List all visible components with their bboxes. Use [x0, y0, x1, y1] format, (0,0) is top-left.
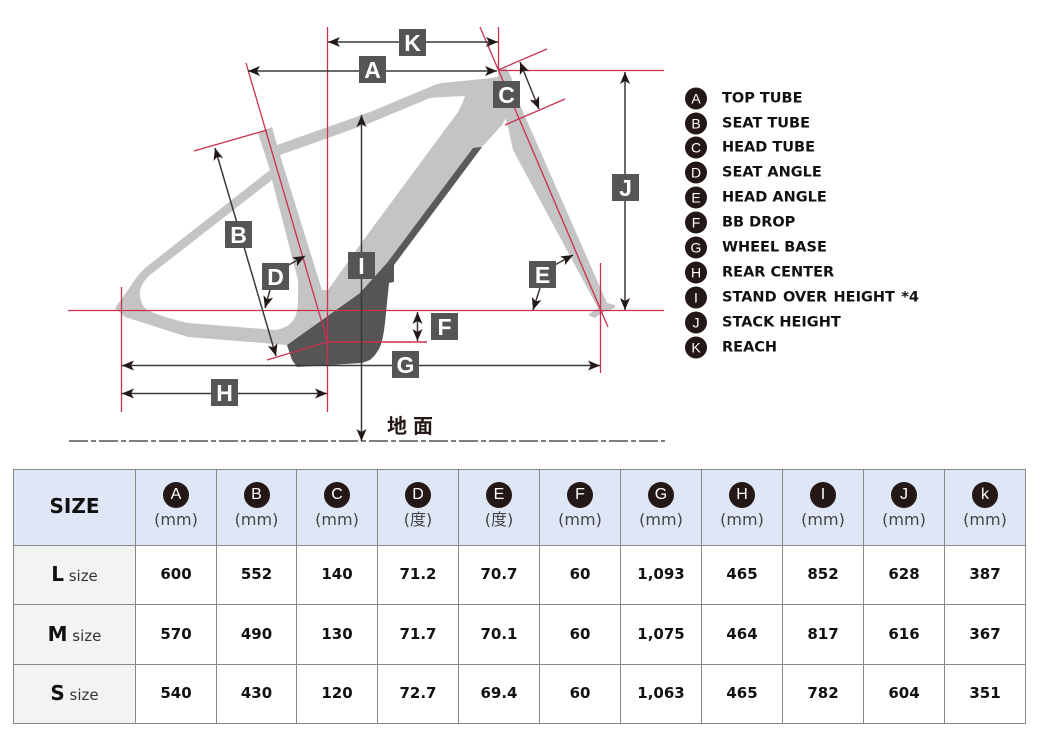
tag B: B: [230, 222, 247, 248]
front fork: [498, 68, 615, 318]
row: M size: 490: [241, 624, 272, 642]
tag I: I: [358, 253, 365, 279]
arrow: head angle lower: [533, 288, 540, 310]
legend item G: WHEEL BASE: [722, 240, 827, 256]
arrow: head angle upper: [553, 255, 573, 266]
legend item B: [685, 112, 810, 134]
arrow: seat angle lower: [265, 290, 270, 308]
legend item J: [685, 312, 841, 334]
row: M size: 60: [570, 624, 590, 642]
row: S size: S size: [50, 681, 99, 705]
table header row: [14, 470, 1025, 723]
tag K: K: [404, 30, 421, 56]
table header row: (mm): [963, 510, 1007, 529]
tag G: [392, 351, 419, 378]
ground label: 地面: [387, 410, 439, 439]
legend item E: [685, 186, 827, 208]
legend item B: B: [691, 116, 701, 132]
row: L size: 465: [726, 565, 758, 583]
legend item J: STACK HEIGHT: [722, 314, 841, 330]
legend item I: I: [694, 290, 698, 306]
arrow: reach: [328, 41, 498, 43]
legend item K: K: [691, 340, 701, 356]
frame: main triangle and rear triangle: [115, 75, 510, 345]
tag D: [262, 263, 289, 290]
legend item H: [685, 262, 834, 284]
row: S size: 1,063: [637, 684, 685, 702]
legend item E: E: [691, 190, 701, 206]
table header row: J: [900, 486, 908, 503]
row: S size: 430: [241, 684, 272, 702]
legend item G: G: [691, 240, 701, 256]
row: L size: 600: [160, 565, 192, 583]
table header row: A: [171, 486, 181, 503]
arrow: top tube: [248, 70, 497, 72]
row: M size: 616: [888, 624, 920, 642]
row: L size: [14, 546, 1001, 604]
row: M size: 1,075: [637, 624, 685, 642]
row: S size: 465: [726, 684, 758, 702]
row: L size: 1,093: [637, 565, 685, 583]
row: S size: 782: [807, 684, 839, 702]
legend item F: BB DROP: [722, 214, 796, 230]
row: L size: 852: [807, 565, 839, 583]
bike geometry diagram: [68, 26, 919, 442]
row: L size: 140: [321, 565, 353, 583]
legend item C: [685, 136, 815, 158]
tag F: F: [437, 314, 452, 340]
legend item I: STAND OVER HEIGHT *4: [722, 290, 919, 306]
legend item F: [685, 212, 796, 234]
table header row: SIZE: [49, 494, 100, 518]
table header row: (度): [485, 510, 513, 529]
table header row: k: [981, 486, 989, 503]
tag A: [359, 56, 386, 83]
row: L size: 552: [241, 565, 272, 583]
arrow: bb drop: [416, 312, 418, 341]
row: M size: 367: [969, 624, 1001, 642]
row: M size: 70.1: [480, 624, 518, 642]
table header row: (mm): [315, 510, 359, 529]
row: M size: 464: [726, 624, 758, 642]
row: S size: 60: [570, 684, 590, 702]
arrow: rear center: [122, 392, 327, 394]
tag G: G: [397, 352, 414, 378]
table header row: B: [251, 486, 262, 503]
bike frame: [115, 68, 615, 367]
battery strip: [370, 147, 482, 283]
row: S size: 604: [888, 684, 920, 702]
row: M size: M size: [48, 622, 101, 646]
legend item D: SEAT ANGLE: [722, 164, 822, 180]
table header row: F: [575, 486, 585, 503]
tag I: [348, 252, 375, 279]
legend item E: HEAD ANGLE: [722, 190, 827, 206]
tag K: [399, 29, 426, 56]
row: S size: 72.7: [399, 684, 436, 702]
tag J: J: [619, 175, 632, 201]
row: M size: 130: [321, 624, 353, 642]
size table: [13, 469, 1026, 724]
legend item C: C: [691, 140, 701, 156]
row: L size: L size: [51, 562, 98, 586]
legend item K: [685, 336, 777, 358]
row: L size: 71.2: [399, 565, 436, 583]
row: S size: 540: [160, 684, 192, 702]
table header row: G: [655, 486, 667, 503]
legend item D: [685, 162, 822, 184]
tag C: C: [498, 82, 515, 108]
row: S size: [14, 665, 1001, 723]
red reference lines: [68, 27, 664, 412]
table header row: (mm): [639, 510, 683, 529]
table header row: (度): [404, 510, 432, 529]
legend item G: [685, 236, 827, 258]
legend item J: J: [692, 314, 700, 330]
arrow: seat tube: [215, 148, 276, 356]
tag C: [493, 81, 520, 108]
legend item A: [685, 88, 803, 110]
row: M size: 71.7: [399, 624, 436, 642]
arrow: seat angle upper: [285, 256, 305, 267]
dimension arrows: [122, 42, 625, 441]
tag F: [431, 313, 458, 340]
row: L size: 628: [888, 565, 920, 583]
legend: [685, 88, 919, 358]
legend item D: D: [691, 164, 701, 180]
table header row: C: [331, 486, 343, 503]
arrow: head tube: [520, 62, 539, 109]
tag D: D: [267, 264, 284, 290]
arrow: wheel base: [122, 364, 600, 366]
legend item C: HEAD TUBE: [722, 140, 815, 156]
tag H: H: [216, 380, 233, 406]
legend item I: [685, 286, 919, 308]
row: S size: 69.4: [480, 684, 518, 702]
legend item A: TOP TUBE: [722, 90, 803, 106]
table header row: H: [736, 486, 748, 503]
table header row: (mm): [558, 510, 602, 529]
table header row: E: [494, 486, 504, 503]
row: M size: 570: [160, 624, 192, 642]
motor unit: [287, 263, 394, 367]
legend item F: F: [692, 214, 700, 230]
table header row: (mm): [801, 510, 845, 529]
letter tags on diagram: [211, 29, 639, 406]
row: M size: 817: [807, 624, 839, 642]
arrow: stand over height: [360, 115, 362, 441]
legend item H: REAR CENTER: [722, 264, 834, 280]
table header row: (mm): [235, 510, 278, 529]
row: L size: 70.7: [480, 565, 518, 583]
ground line: [67, 440, 665, 442]
legend item B: SEAT TUBE: [722, 116, 810, 132]
legend item H: H: [691, 264, 701, 280]
table header row: (mm): [720, 510, 764, 529]
tag B: [225, 221, 252, 248]
tag E: E: [535, 262, 550, 288]
row: S size: 351: [969, 684, 1001, 702]
legend item A: A: [691, 90, 701, 106]
table header row: (mm): [882, 510, 926, 529]
legend item K: REACH: [722, 340, 777, 356]
row: L size: 387: [969, 565, 1001, 583]
table header row: (mm): [154, 510, 198, 529]
row: S size: 120: [321, 684, 353, 702]
tag A: A: [364, 57, 381, 83]
tag J: [612, 174, 639, 201]
tag H: [211, 379, 238, 406]
table header row: D: [412, 486, 424, 503]
table header row: I: [821, 486, 825, 503]
arrow: stack height: [624, 72, 626, 310]
row: M size: [14, 605, 1001, 664]
row: L size: 60: [570, 565, 590, 583]
tag E: [529, 261, 556, 288]
